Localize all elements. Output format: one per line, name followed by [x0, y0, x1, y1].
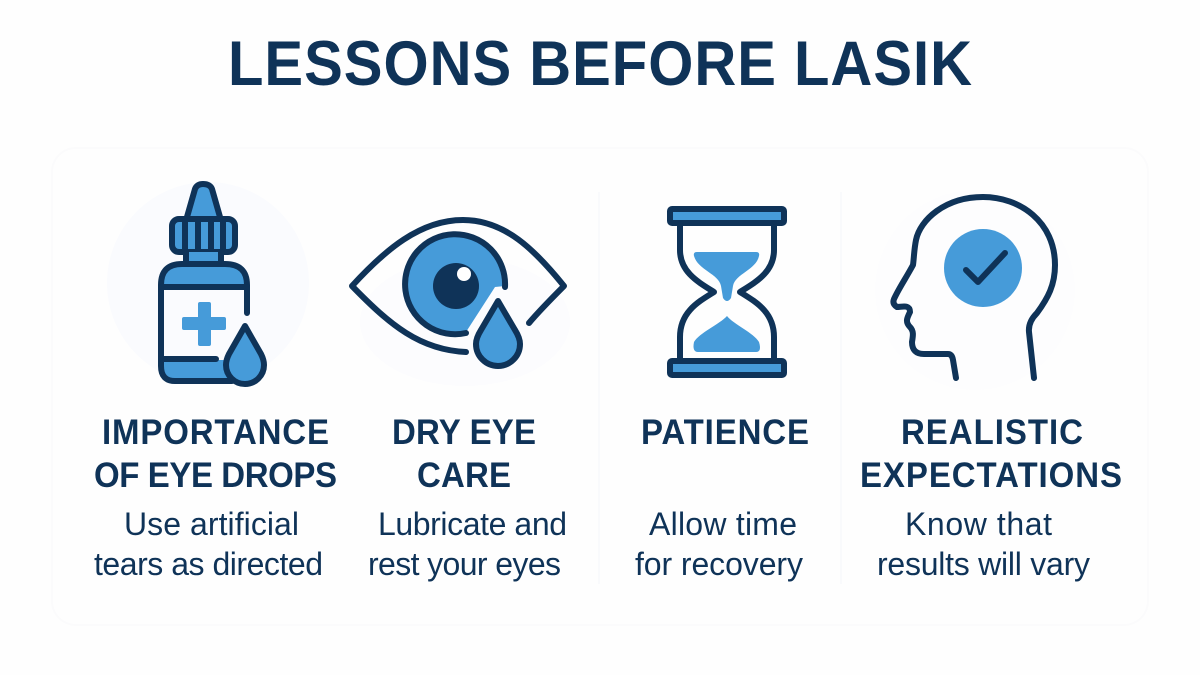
column: realistic expectations text: results will vary	[877, 546, 1090, 582]
column: realistic expectations text	[860, 413, 1122, 582]
column: realistic expectations text: EXPECTATIONS	[860, 456, 1122, 495]
icon: hourglass	[670, 209, 784, 375]
column: eye drops text: tears as directed	[94, 546, 323, 582]
column: dry eye text: CARE	[417, 456, 511, 495]
column: patience text: for recovery	[635, 546, 803, 582]
column: realistic expectations text: Know that	[905, 506, 1052, 542]
column: eye drops text: OF EYE DROPS	[94, 456, 337, 495]
icon: eye drop bottle	[161, 184, 264, 384]
icon: tear drop	[476, 301, 520, 366]
icon: medical cross	[182, 302, 226, 346]
icon: eye with tear	[352, 220, 564, 366]
icon: head with check	[893, 197, 1055, 378]
title: LESSONS BEFORE LASIK	[228, 28, 972, 98]
column: dry eye text	[368, 413, 567, 582]
column: dry eye text: DRY EYE	[392, 413, 536, 452]
icon: drop on bottle	[226, 326, 264, 384]
column: realistic expectations text: REALISTIC	[901, 413, 1083, 452]
column: eye drops text: Use artificial	[124, 506, 299, 542]
panel: card background	[52, 148, 1148, 625]
column: dry eye text: Lubricate and	[378, 506, 567, 542]
column: dry eye text: rest your eyes	[368, 546, 561, 582]
column: patience text	[635, 413, 809, 582]
column: patience text: PATIENCE	[641, 413, 809, 452]
column: eye drops text	[94, 413, 337, 582]
column: eye drops text: IMPORTANCE	[102, 413, 329, 452]
column: patience text: Allow time	[649, 506, 797, 542]
